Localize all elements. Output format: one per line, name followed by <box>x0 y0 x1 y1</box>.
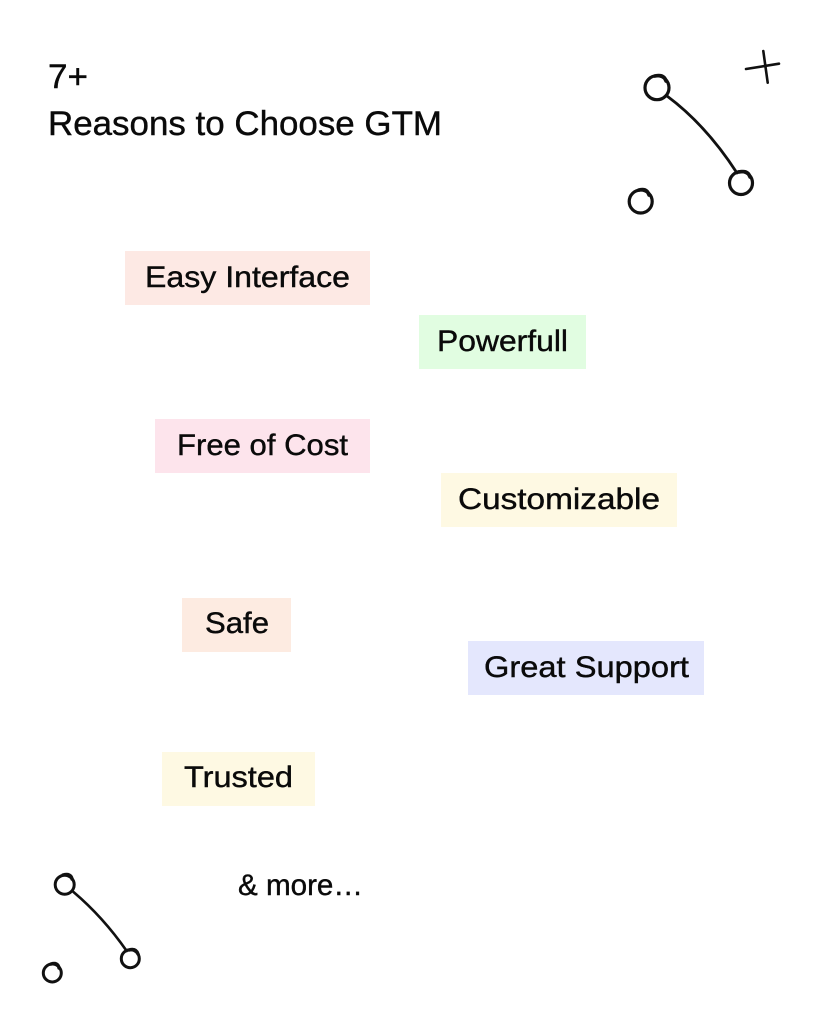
title <box>48 58 442 143</box>
title: 7+ <box>48 58 88 96</box>
tag: Easy Interface: Easy Interface <box>145 261 350 294</box>
text: and more: & more… <box>238 869 363 902</box>
tag: Trusted <box>162 752 315 806</box>
tag: Powerfull: Powerfull <box>437 325 568 358</box>
icon: bottom-left doodle <box>43 874 139 982</box>
tag: Great Support <box>468 641 704 695</box>
tag: Customizable: Customizable <box>458 483 660 516</box>
icon: top-right doodle <box>629 51 779 213</box>
tag: Free of Cost: Free of Cost <box>177 429 348 462</box>
tag: Free of Cost <box>155 419 370 473</box>
tag: Easy Interface <box>125 251 370 305</box>
tag: Powerfull <box>419 315 586 369</box>
tag: Customizable <box>441 473 677 527</box>
tag: Safe <box>182 598 291 652</box>
tag: Great Support: Great Support <box>484 651 689 684</box>
title: Reasons to Choose GTM <box>48 105 442 143</box>
tag: Trusted: Trusted <box>184 761 293 794</box>
tag: Safe: Safe <box>205 607 269 640</box>
